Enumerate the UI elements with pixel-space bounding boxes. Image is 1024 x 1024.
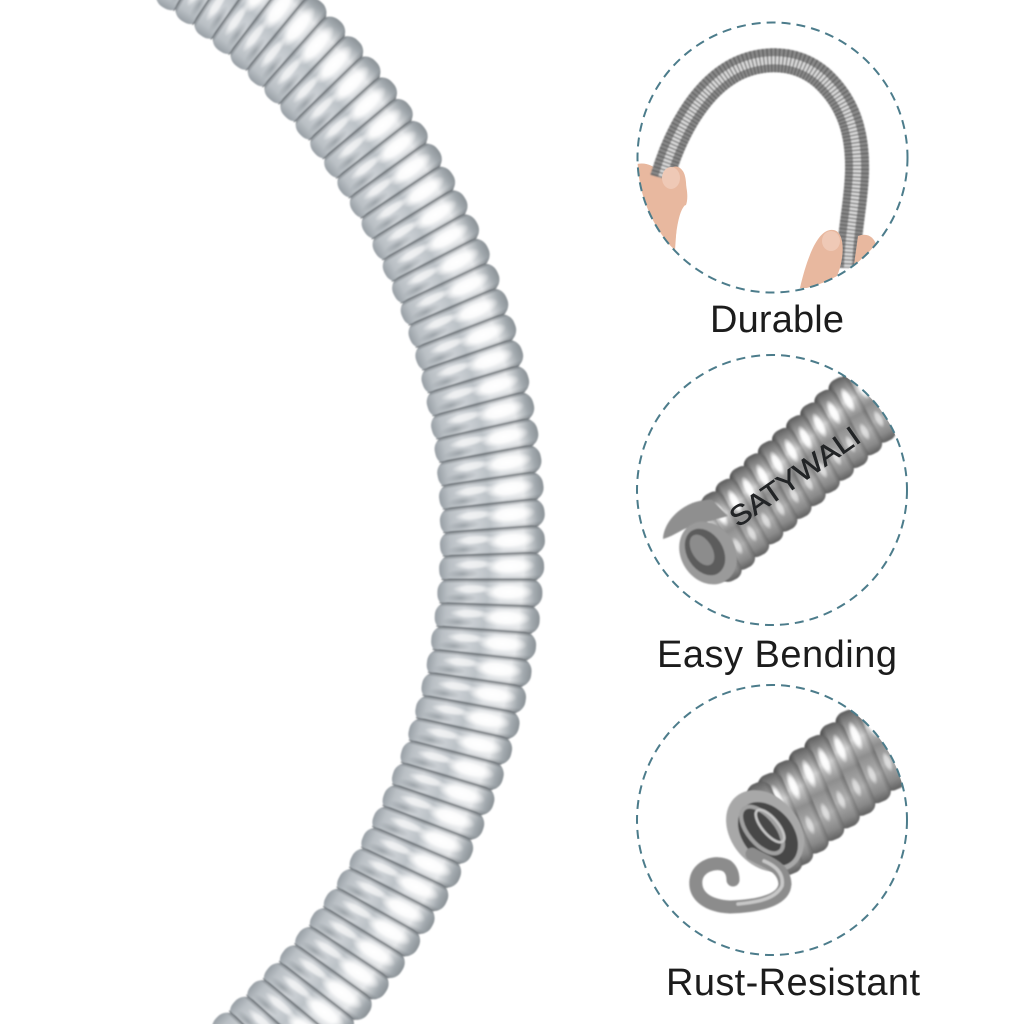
- label: Easy Bending: Easy Bending: [657, 634, 897, 676]
- label: Durable: Durable: [710, 299, 844, 341]
- spring coils: [746, 709, 902, 876]
- icon: left thumb: [672, 166, 686, 234]
- spring opening: [662, 500, 737, 586]
- spring coils: [700, 376, 896, 583]
- icon: right finger: [854, 234, 876, 264]
- icon: right thumbnail: [822, 231, 840, 251]
- icon: left hand: [637, 163, 687, 250]
- spring arch: [662, 60, 857, 268]
- main curved spring: [124, 0, 546, 1024]
- watermark: SATYWALI: [724, 420, 866, 533]
- dashed circle: [638, 22, 908, 292]
- label: Rust-Resistant: Rust-Resistant: [666, 962, 920, 1004]
- spring opening: [725, 790, 804, 872]
- panel: durable: [637, 22, 908, 341]
- photo: spring end: [662, 376, 896, 586]
- icon: left thumbnail: [662, 167, 680, 189]
- dashed circle: [637, 355, 907, 625]
- icon: right thumb: [800, 230, 843, 288]
- photo: bent spring held by fingers: [637, 60, 876, 288]
- photo: spring with hook: [688, 709, 902, 914]
- panel: rust-resistant: [636, 684, 920, 996]
- dashed circle: [637, 685, 907, 955]
- panel: easy bending: [636, 354, 908, 675]
- icon: hook: [696, 854, 785, 907]
